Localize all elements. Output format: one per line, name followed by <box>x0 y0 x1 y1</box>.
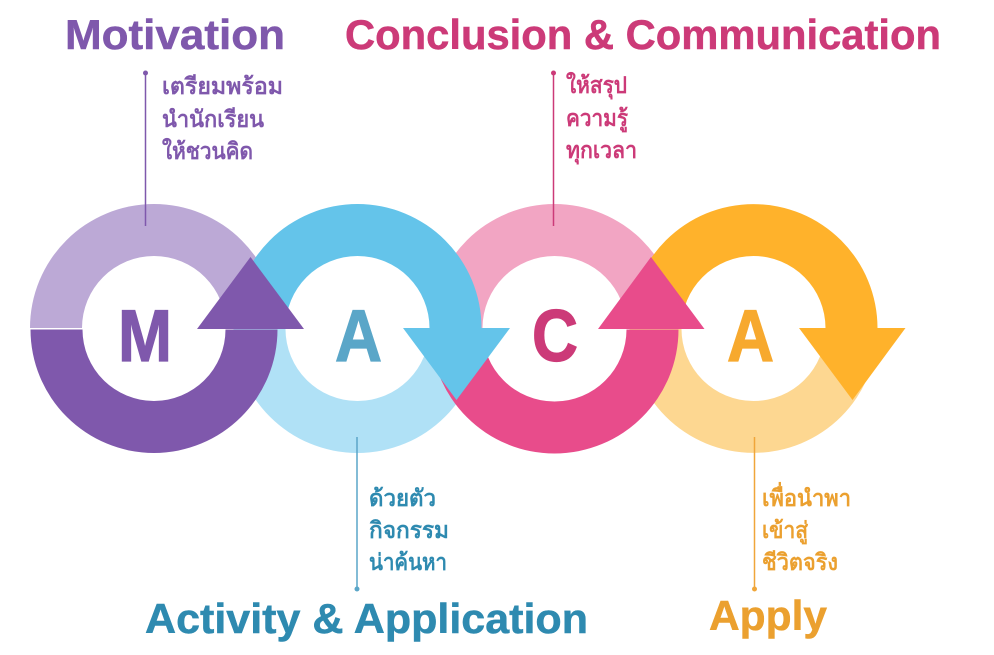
leader: Conclusion <box>551 70 556 226</box>
arrow: Apply down <box>799 328 906 400</box>
heading: Conclusion & Communication: Conclusion & Communication <box>345 11 941 58</box>
text: Motivation: เตรียมพร้อม <box>162 73 283 99</box>
arrow: Conclusion up <box>598 257 704 329</box>
text: Apply: เพื่อนำพา <box>762 481 851 511</box>
arc: Apply top <box>630 204 878 328</box>
arrow: Activity down <box>403 328 510 400</box>
text: Apply: ชีวิตจริง <box>762 549 838 575</box>
arc: Activity bottom <box>234 329 482 453</box>
text: Conclusion: ทุกเวลา <box>566 137 637 165</box>
letter A: A <box>335 296 382 377</box>
text: Conclusion: ให้สรุป <box>566 71 627 100</box>
text: Apply <box>762 481 851 575</box>
arc: Conclusion bottom <box>430 330 678 454</box>
text: Motivation: นำนักเรียน <box>162 106 264 132</box>
arc: Motivation bottom <box>30 330 278 453</box>
letter M: M <box>118 296 172 377</box>
leader: Activity <box>354 437 360 592</box>
text: Activity: น่าค้นหา <box>369 549 447 575</box>
arc: Activity top <box>234 204 482 328</box>
leader: Apply <box>752 437 757 592</box>
text: Conclusion: ความรู้ <box>566 105 629 133</box>
text: Motivation <box>162 73 283 164</box>
heading: Motivation: Motivation <box>65 11 285 58</box>
text: Activity <box>369 485 449 575</box>
arc: Conclusion top <box>430 204 678 328</box>
text: Motivation: ให้ชวนคิด <box>162 137 253 164</box>
text: Conclusion <box>566 71 637 165</box>
text: Activity: กิจกรรม <box>369 517 449 543</box>
heading: Activity & Application: Activity & Application <box>145 595 588 642</box>
text: Apply: เข้าสู่ <box>762 517 809 545</box>
heading: Apply: Apply <box>709 592 828 639</box>
text: Activity: ด้วยตัว <box>369 485 436 511</box>
leader: Motivation <box>143 70 148 226</box>
arrow: Motivation up <box>197 257 304 329</box>
arc: Apply bottom <box>630 329 878 453</box>
letter C: C <box>532 296 578 377</box>
letter A: A <box>727 296 774 377</box>
arc: Motivation top <box>30 204 278 328</box>
